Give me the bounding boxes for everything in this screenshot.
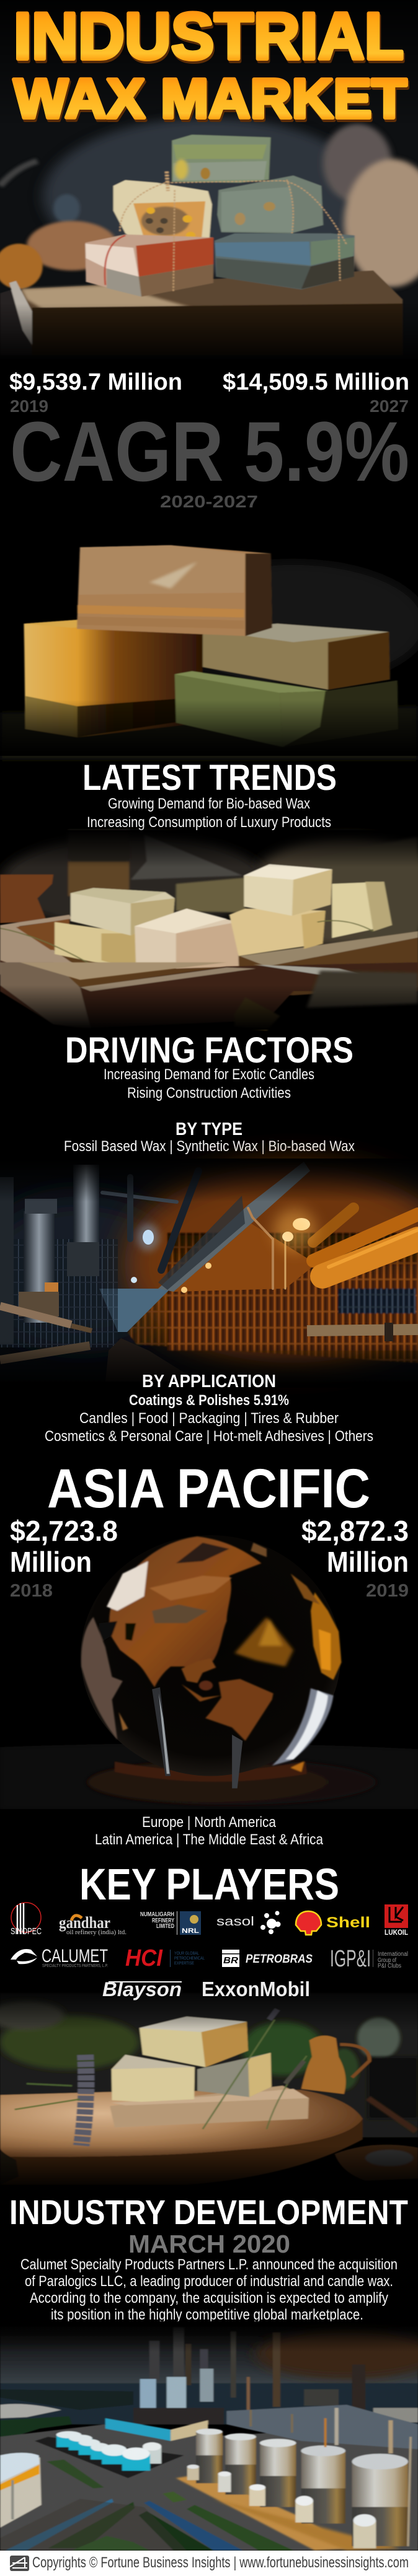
power house stacks (140, 2328, 365, 2418)
other regions (95, 1814, 324, 1848)
logo: Petrobras (222, 1950, 313, 1967)
heading: LATEST TRENDS (82, 758, 337, 798)
trend items: Increasing Consumption of Luxury Products (87, 814, 331, 831)
stat 2027 (223, 369, 409, 416)
stat 2019: $9,539.7 Million (9, 369, 182, 395)
tank (301, 2445, 345, 2523)
tan horizontal pipe (307, 1330, 418, 1331)
glass reflection (272, 1688, 334, 1766)
wooden slab (0, 2090, 363, 2185)
logo: HCI: YOUR GLOBAL (174, 1952, 199, 1956)
southern landmass (205, 1679, 273, 1741)
small tanks (187, 2464, 376, 2548)
fade under blocks (0, 700, 418, 756)
logo: IG P&I: P&I Clubs (378, 1963, 401, 1969)
subheading: BY APPLICATION (142, 1372, 276, 1391)
catwalk (158, 1162, 316, 1292)
application list (45, 1410, 373, 1445)
by application (45, 1372, 373, 1445)
other regions: Latin America | The Middle East & Africa (95, 1831, 324, 1848)
board (110, 2086, 309, 2127)
stat 2019 (9, 369, 182, 416)
logo: Shell: Shell (326, 1914, 370, 1931)
logo: HCI (125, 1945, 205, 1971)
logo: Sinopec (11, 1903, 42, 1937)
stat 2018: Million (10, 1546, 92, 1578)
ground (0, 2424, 418, 2551)
factor items (104, 1066, 314, 1102)
image: aerial view of wax plant (0, 2321, 418, 2551)
logo: Petrobras: PETROBRAS (246, 1953, 313, 1966)
left horizontal pipes (0, 1306, 92, 1360)
stat 2019: Million (327, 1546, 409, 1578)
wax block: right (197, 2052, 272, 2097)
tank (352, 2454, 408, 2546)
tray (0, 915, 418, 996)
cube (135, 909, 239, 968)
logo: HCI: EXPERTISE (174, 1961, 194, 1966)
stat 2018: 2018 (10, 1581, 53, 1601)
image: molten globe (0, 1535, 418, 1809)
title: WAX MARKET (14, 68, 407, 130)
drips (152, 1687, 242, 1789)
wax bar: cream with seeds (113, 180, 212, 244)
tank (196, 2429, 223, 2483)
application list: Candles | Food | Packaging | Tires & Rubber (79, 1410, 339, 1427)
logo: IG P&I: Group of (378, 1957, 396, 1964)
logo: Lukoil (385, 1904, 408, 1937)
wax bar: top green (172, 134, 270, 183)
heading: DRIVING FACTORS (65, 1030, 354, 1071)
logo: Gandhar: gandhar (59, 1914, 110, 1932)
plant block (105, 2390, 418, 2449)
block: striped top (77, 545, 272, 636)
stat 2027: $14,509.5 Million (223, 369, 409, 395)
tank (225, 2434, 256, 2495)
stat 2018: $2,723.8 (10, 1515, 118, 1547)
stat 2018 (10, 1515, 118, 1601)
market size stats (9, 369, 409, 416)
blue ceiling (99, 1289, 171, 1332)
surface (0, 1743, 418, 1809)
title: INDUSTRIAL (15, 1, 405, 76)
image: refinery interior with pipes (0, 1159, 418, 1388)
trend items: Growing Demand for Bio-based Wax (108, 795, 310, 812)
tank (260, 2439, 296, 2507)
logo: Numaligarh Refinery: REFINERY (152, 1917, 174, 1924)
key players (11, 1860, 408, 2000)
northern landmass (109, 1536, 261, 1687)
image: stacked raw wax blocks (0, 545, 418, 760)
logo: ExxonMobil: ExxonMobil (202, 1978, 310, 2000)
stat 2019: 2019 (366, 1581, 409, 1601)
roads and green (0, 2460, 293, 2551)
western sliver (81, 1617, 123, 1740)
date: MARCH 2020 (128, 2230, 290, 2258)
logo: IG P&I: International (378, 1951, 408, 1958)
asia pacific heading: ASIA PACIFIC (47, 1457, 370, 1519)
image: wax on wooden slab (0, 1982, 418, 2190)
logo: Shell (296, 1911, 370, 1935)
sphere (81, 1535, 341, 1776)
puddle (88, 1759, 376, 1805)
hero image: stacked wax bars on wooden table (0, 0, 418, 366)
logo: Sinopec: SINOPEC (11, 1926, 42, 1937)
logo: Numaligarh Refinery: NUMALIGARH (140, 1911, 174, 1918)
logo: Petrobras: BR (223, 1955, 238, 1966)
logo: Blayson: Blayson (102, 1978, 182, 2000)
vertical pipework (251, 2408, 411, 2546)
eastern bright landmass (311, 1592, 341, 1680)
twine (120, 172, 347, 291)
cyan tank group (35, 2431, 184, 2478)
continents (81, 1536, 341, 1741)
logo: Sasol: sasol (216, 1915, 254, 1929)
description: its position in the highly competitive global marketplace. (51, 2307, 363, 2323)
stat 2027: 2027 (370, 396, 409, 416)
trend items (87, 795, 331, 831)
bright fixtures (131, 1209, 316, 1293)
latest trends (82, 758, 337, 831)
block: green (175, 671, 398, 747)
bowl (335, 2145, 418, 2181)
title (14, 0, 408, 133)
silver tanks (187, 2429, 408, 2548)
big white tank (0, 2453, 42, 2528)
logo: Numaligarh Refinery: NRL (182, 1927, 199, 1935)
distant land (0, 2383, 418, 2424)
footer (0, 2551, 418, 2576)
wax block: top (140, 2017, 248, 2067)
wax bar: red and white (86, 234, 213, 297)
asia lobe (181, 1658, 216, 1683)
asia pacific stats (10, 1515, 409, 1601)
block: yellow (24, 620, 203, 737)
footer logo (10, 2556, 29, 2571)
cube (55, 922, 136, 971)
highlighted segment: Coatings & Polishes 5.91% (129, 1392, 289, 1409)
by type (64, 1119, 355, 1155)
logo: Lukoil: LUKOIL (385, 1928, 408, 1937)
cube (332, 882, 392, 938)
left machinery (0, 1239, 118, 1347)
title: INDUSTRIAL (14, 0, 404, 73)
wax bar: grey right (217, 175, 323, 234)
factor items: Increasing Demand for Exotic Candles (104, 1066, 314, 1083)
logo: Calumet: SPECIALTY PRODUCTS PARTNERS, L.P. (42, 1964, 108, 1968)
herb sprigs (0, 921, 373, 965)
factor items: Rising Construction Activities (127, 1085, 291, 1102)
type list: Fossil Based Wax | Synthetic Wax | Bio-based Wax (64, 1138, 355, 1155)
wax bar: blue (215, 234, 355, 289)
block: tan (203, 624, 390, 690)
heading: KEY PLAYERS (79, 1860, 339, 1909)
logo: Gandhar: oil refinery (india) ltd. (66, 1929, 127, 1936)
application list: Cosmetics & Personal Care | Hot-melt Adhesives | Others (45, 1428, 373, 1445)
wax block: left (112, 2055, 195, 2102)
CAGR: 2020-2027 (160, 492, 258, 511)
stat 2019: $2,872.3 (301, 1515, 409, 1547)
title: WAX MARKET (15, 71, 408, 133)
image: wax cubes in wooden tray (0, 830, 418, 1030)
cube (71, 888, 175, 935)
orange pipes (102, 1171, 418, 1289)
cube (244, 864, 332, 916)
stat 2019: 2019 (10, 396, 48, 416)
industry development (9, 2193, 408, 2323)
logo: IG P&I: IGP&I (330, 1946, 371, 1972)
lit floor (176, 2474, 355, 2551)
logo: Numaligarh Refinery (140, 1911, 201, 1935)
cube (229, 909, 326, 956)
logo: HCI: PETROCHEMICAL (174, 1956, 205, 1961)
jar (301, 2036, 370, 2094)
other regions: Europe | North America (142, 1814, 277, 1831)
logo: Numaligarh Refinery: LIMITED (156, 1923, 174, 1930)
logo: Calumet: CALUMET (42, 1946, 108, 1966)
vertical columns (24, 1211, 55, 1323)
logo: HCI: HCI (125, 1945, 163, 1971)
driving factors (65, 1030, 354, 1102)
lavender sprigs (15, 2009, 307, 2145)
logo: Sasol (216, 1911, 280, 1934)
logo: Calumet (11, 1946, 108, 1968)
stat 2019 (301, 1515, 409, 1601)
gold patch (234, 1617, 293, 1667)
description (20, 2256, 398, 2323)
machinery right of catwalk (127, 1233, 418, 1363)
logo: Gandhar (59, 1914, 127, 1936)
subheading: BY TYPE (176, 1119, 242, 1139)
